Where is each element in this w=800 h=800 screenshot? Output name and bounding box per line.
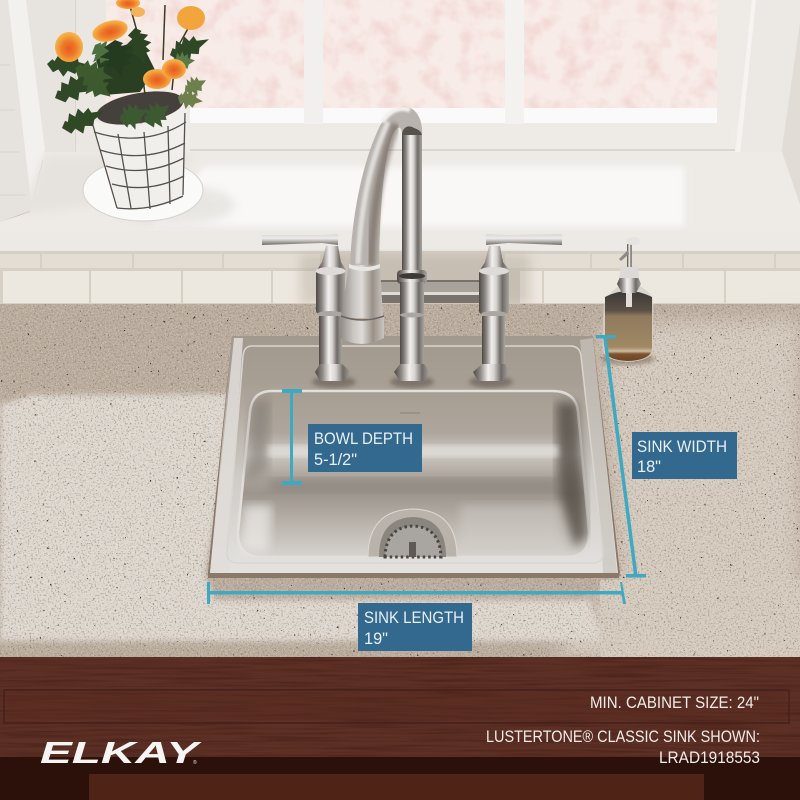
dimension: bowl depth <box>282 389 422 485</box>
sink width label: 18" <box>637 457 661 476</box>
dimension: sink width <box>596 335 737 578</box>
drain <box>368 509 457 557</box>
Elkay logo: ELKAY <box>40 735 203 770</box>
left tap <box>262 234 351 381</box>
registered mark: ® <box>193 759 197 766</box>
bowl shading <box>240 398 587 552</box>
wire cage <box>92 113 186 209</box>
bridge <box>378 280 483 303</box>
granite speckle <box>0 304 800 658</box>
pot <box>92 104 187 209</box>
left window jamb <box>0 0 106 222</box>
window panes with blurred blossom view <box>106 0 718 108</box>
sink width measure line <box>596 335 646 578</box>
cabinet size note: MIN. CABINET SIZE: 24" <box>590 694 759 712</box>
recessed panel <box>4 690 789 723</box>
window sill <box>0 152 800 253</box>
dimension: sink length <box>207 582 626 651</box>
window and back wall <box>0 0 800 222</box>
sink <box>208 336 620 578</box>
foliage <box>47 25 214 140</box>
arched spout <box>340 107 422 344</box>
sink length label: SINK LENGTH <box>364 608 464 627</box>
faucet <box>262 107 562 388</box>
bowl depth label <box>308 424 422 472</box>
sunlit area right <box>560 318 800 658</box>
flower stems <box>120 5 190 95</box>
cabinet <box>0 657 800 800</box>
bowl depth measure line <box>282 389 302 485</box>
saucer <box>83 159 203 221</box>
center column <box>394 130 430 381</box>
sink width label <box>632 432 737 479</box>
toe kick shadow <box>0 757 800 800</box>
sink deck <box>208 336 620 578</box>
sink length label <box>358 603 472 651</box>
model note: LRAD1918553 <box>659 749 760 767</box>
sink width label: SINK WIDTH <box>637 437 727 456</box>
bowl depth label: BOWL DEPTH <box>314 429 413 448</box>
tile backsplash <box>0 253 800 306</box>
bowl depth label: 5-1/2" <box>314 450 357 469</box>
potted plant <box>47 0 214 221</box>
granite countertop <box>0 304 800 658</box>
window frame <box>190 0 800 210</box>
model note <box>486 728 760 767</box>
soap dispenser <box>601 237 655 365</box>
sink bowl <box>238 391 589 557</box>
soil <box>94 86 186 130</box>
base shadows <box>312 376 513 388</box>
sink rim highlights <box>210 338 243 573</box>
logo stamp on bowl wall <box>400 412 420 414</box>
model note: LUSTERTONE® CLASSIC SINK SHOWN: <box>486 728 760 746</box>
sunlit area left <box>0 394 600 641</box>
right tap <box>473 234 562 381</box>
sink length measure line <box>207 582 626 604</box>
sink length label: 19" <box>364 629 388 648</box>
flowers <box>55 0 205 89</box>
